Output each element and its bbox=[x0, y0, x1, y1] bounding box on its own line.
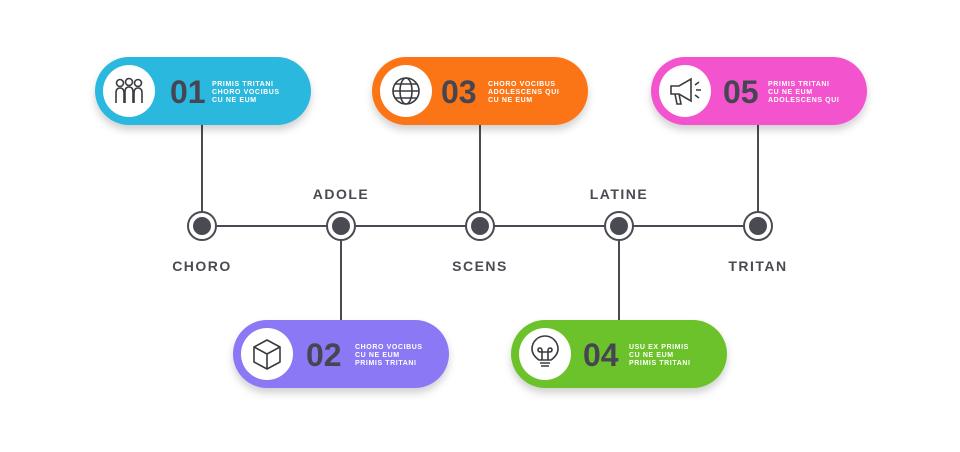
pill 03 bbox=[372, 57, 588, 125]
node: scens bbox=[466, 212, 494, 240]
pill 01: 01 bbox=[170, 74, 206, 110]
pill 03: CHORO VOCIBUS bbox=[488, 81, 556, 88]
pill 04: PRIMIS TRITANI bbox=[629, 360, 691, 367]
icon: people bbox=[116, 78, 142, 103]
label: LATINE: LATINE bbox=[590, 186, 648, 202]
pill 05 bbox=[651, 57, 867, 125]
pill 02: PRIMIS TRITANI bbox=[355, 360, 417, 367]
pill 03: 03 bbox=[441, 74, 477, 110]
pill 04 bbox=[511, 320, 727, 388]
node: choro bbox=[188, 212, 216, 240]
pill 02: CHORO VOCIBUS bbox=[355, 344, 423, 351]
label: CHORO: CHORO bbox=[172, 258, 232, 274]
icon: cube bbox=[254, 340, 280, 369]
label: ADOLE: ADOLE bbox=[313, 186, 369, 202]
icon: light bulb bbox=[532, 336, 558, 366]
pill 03: ADOLESCENS QUI bbox=[488, 89, 559, 96]
node: latine bbox=[605, 212, 633, 240]
pill 01 bbox=[95, 57, 311, 125]
timeline connectors bbox=[202, 120, 758, 325]
pill 04: USU EX PRIMIS bbox=[629, 344, 689, 351]
pill 01: CU NE EUM bbox=[212, 97, 257, 104]
pill 01: CHORO VOCIBUS bbox=[212, 89, 280, 96]
pill 04: CU NE EUM bbox=[629, 352, 674, 359]
pill 04: 04 bbox=[583, 337, 619, 373]
pill 02 bbox=[233, 320, 449, 388]
node: adole bbox=[327, 212, 355, 240]
label: SCENS: SCENS bbox=[452, 258, 508, 274]
pill 03: CU NE EUM bbox=[488, 97, 533, 104]
pill 02: CU NE EUM bbox=[355, 352, 400, 359]
icon: globe bbox=[393, 78, 419, 104]
pill 05: 05 bbox=[723, 74, 759, 110]
pill 02: 02 bbox=[306, 337, 342, 373]
pill 05: ADOLESCENS QUI bbox=[768, 97, 839, 104]
pill 01: PRIMIS TRITANI bbox=[212, 81, 274, 88]
icon: megaphone bbox=[671, 79, 701, 104]
label: TRITAN: TRITAN bbox=[728, 258, 788, 274]
pill 05: CU NE EUM bbox=[768, 89, 813, 96]
node: tritan bbox=[744, 212, 772, 240]
pill 05: PRIMIS TRITANI bbox=[768, 81, 830, 88]
